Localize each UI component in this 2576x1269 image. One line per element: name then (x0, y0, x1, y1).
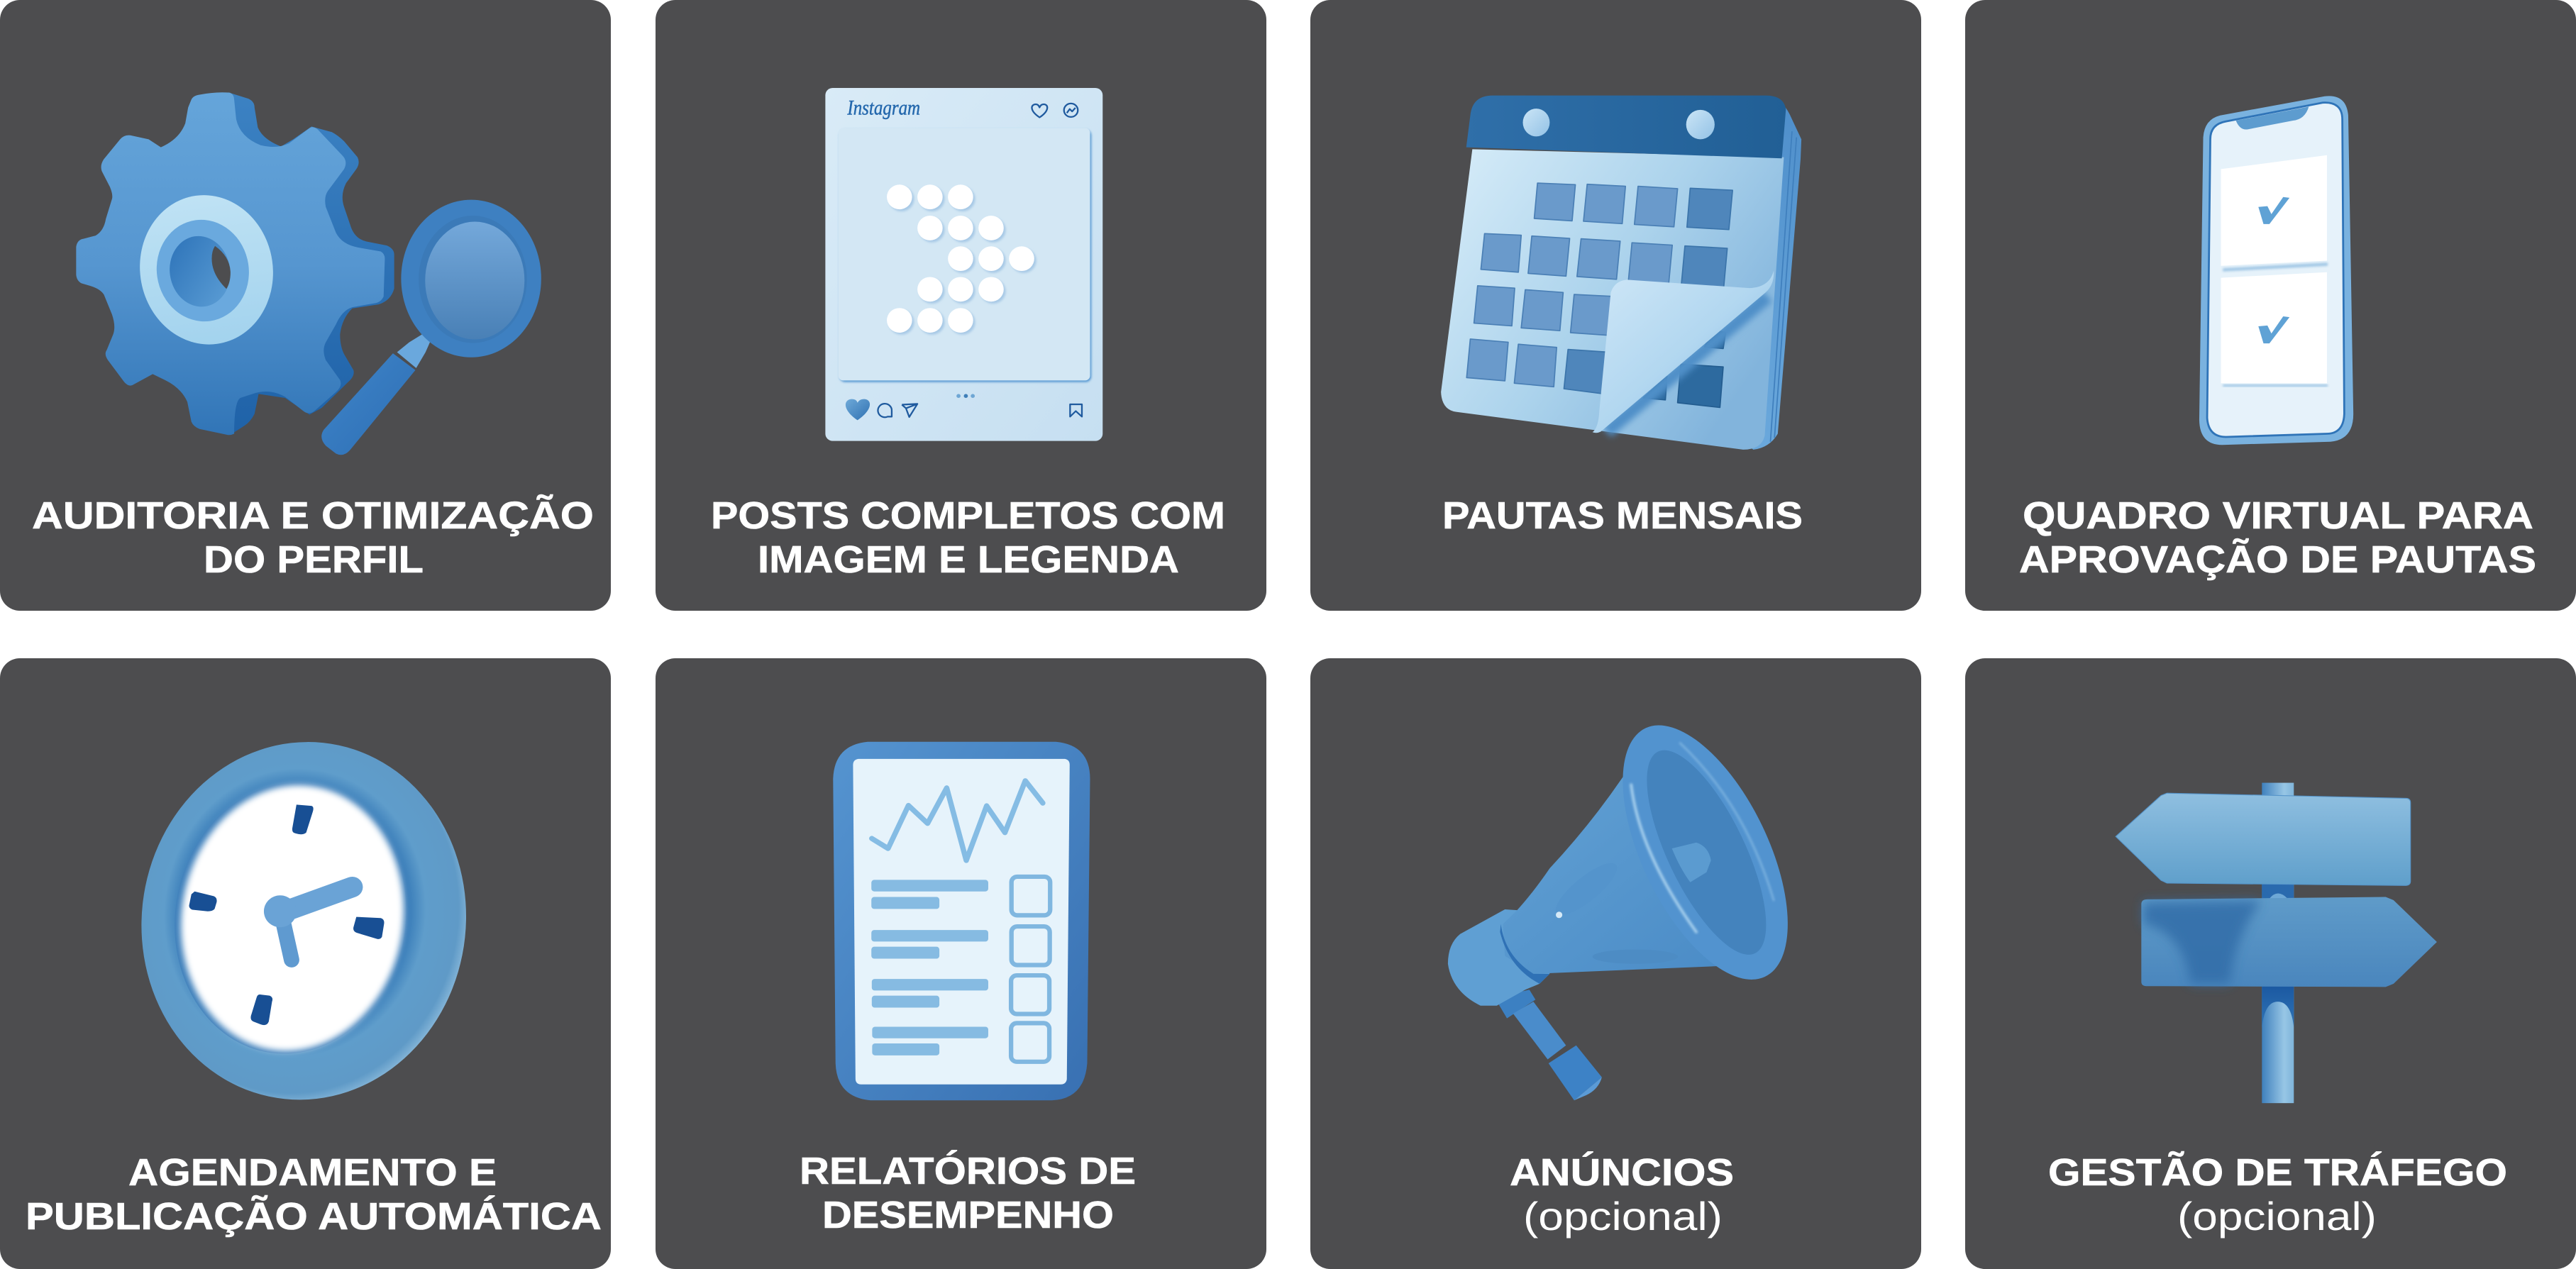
icon: filled heart (846, 399, 870, 420)
folded page corner (1593, 270, 1774, 433)
heading: relatórios de desempenho: RELATÓRIOS DE (800, 1150, 1136, 1192)
heading: anúncios (opcional) (1510, 1151, 1734, 1238)
icon: gear and magnifier (76, 92, 541, 455)
heading: pautas mensais: PAUTAS MENSAIS (1442, 494, 1803, 537)
sign arrow left (2116, 793, 2411, 885)
heading: auditoria e otimização do perfil: AUDITORIA E OTIMIZAÇÃO (32, 494, 594, 537)
heading: relatórios de desempenho: DESEMPENHO (822, 1194, 1114, 1236)
icon: messenger (1064, 104, 1078, 117)
heading: auditoria e otimização do perfil: DO PERFIL (204, 538, 424, 581)
dot arrow (887, 184, 1037, 335)
calendar day squares (1466, 183, 1732, 407)
heading: auditoria e otimização do perfil (32, 494, 594, 581)
icon: clock (123, 726, 484, 1116)
heading: agendamento e publicação automática: AGENDAMENTO E (128, 1151, 497, 1194)
icon: send (902, 404, 917, 417)
heading: relatórios de desempenho (800, 1150, 1136, 1236)
clock hands (264, 887, 353, 960)
heading: anúncios (opcional): (opcional) (1523, 1194, 1723, 1238)
icon: megaphone (1448, 702, 1822, 1100)
heading: posts completos com imagem e legenda (711, 494, 1225, 581)
panel: agendamento e publicação automática (0, 658, 611, 1269)
panel: gestão de tráfego (1965, 658, 2576, 1269)
panel: relatórios de desempenho (656, 658, 1266, 1269)
panel: pautas mensais (1310, 0, 1921, 611)
clock hour ticks (189, 804, 384, 1025)
heading: agendamento e publicação automática (26, 1151, 602, 1238)
heading: gestão de tráfego (opcional): GESTÃO DE TRÁFEGO (2048, 1151, 2507, 1194)
carousel dots (956, 394, 975, 398)
report rows (871, 877, 1050, 1062)
icon: calendar (1441, 96, 1801, 450)
heading: posts completos com imagem e legenda: IMAGEM E LEGENDA (758, 538, 1179, 581)
icon: phone with checklist (2199, 96, 2353, 445)
heading: gestão de tráfego (opcional) (2048, 1151, 2507, 1238)
heading: quadro virtual para aprovação de pautas: QUADRO VIRTUAL PARA (2023, 494, 2533, 537)
icon: bookmark (1070, 404, 1082, 416)
sign arrow right (2141, 897, 2437, 987)
icon: header heart (1032, 104, 1047, 117)
icon: instagram post card (825, 88, 1102, 441)
panel: auditoria e otimização do perfil (0, 0, 611, 611)
panel: posts completos com imagem e legenda (656, 0, 1266, 611)
approval card 2 (2221, 272, 2327, 383)
panel: anúncios (1310, 658, 1921, 1269)
icon: signpost (2116, 783, 2437, 1103)
heading: anúncios (opcional): ANÚNCIOS (1510, 1151, 1734, 1194)
heading: quadro virtual para aprovação de pautas: APROVAÇÃO DE PAUTAS (2019, 538, 2536, 581)
text: instagram logo: Instagram (847, 97, 920, 119)
panel: quadro virtual para aprovação de pautas (1965, 0, 2576, 611)
icon: comment (878, 404, 892, 417)
heading: agendamento e publicação automática: PUBLICAÇÃO AUTOMÁTICA (26, 1195, 602, 1238)
heading: posts completos com imagem e legenda: POSTS COMPLETOS COM (711, 494, 1225, 537)
heading: quadro virtual para aprovação de pautas (2019, 494, 2536, 581)
line chart (872, 781, 1043, 860)
icon: report tablet (833, 742, 1090, 1100)
heading: gestão de tráfego (opcional): (opcional) (2177, 1194, 2377, 1238)
approval card 1 (2221, 155, 2327, 266)
